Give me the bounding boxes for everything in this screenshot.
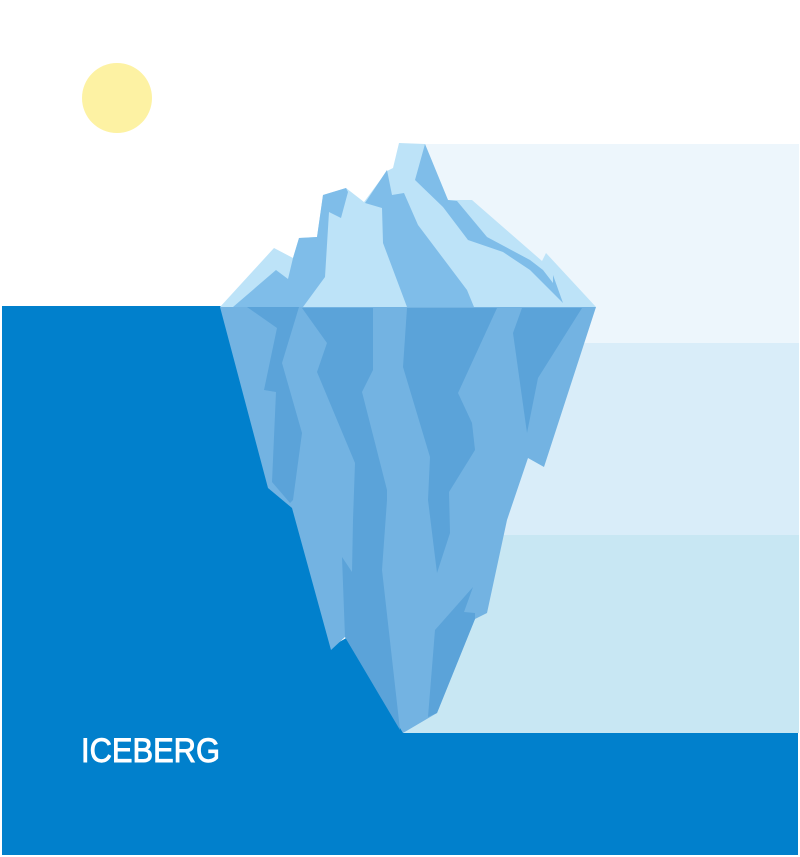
sky panel: lower band	[403, 535, 799, 733]
submerged facet 4	[513, 308, 582, 433]
iceberg tip: light silhouette	[220, 143, 596, 307]
sky panel: middle band	[420, 343, 799, 535]
submerged facet 5	[428, 587, 475, 717]
iceberg tip: right shadow facet	[415, 144, 563, 303]
iceberg below water	[220, 307, 596, 733]
sky panel: upper band	[420, 144, 799, 343]
iceberg above water	[220, 143, 596, 307]
sun	[82, 63, 152, 133]
submerged facet 3	[403, 308, 497, 573]
submerged body	[220, 307, 596, 733]
submerged facet 1	[247, 307, 302, 503]
iceberg tip: centre shadow facet	[365, 170, 474, 307]
submerged facet 2	[302, 308, 400, 730]
iceberg tip: left shadow facet	[233, 188, 348, 307]
title: ICEBERG: ICEBERG	[81, 732, 220, 770]
sea: deep blue water	[2, 306, 798, 855]
